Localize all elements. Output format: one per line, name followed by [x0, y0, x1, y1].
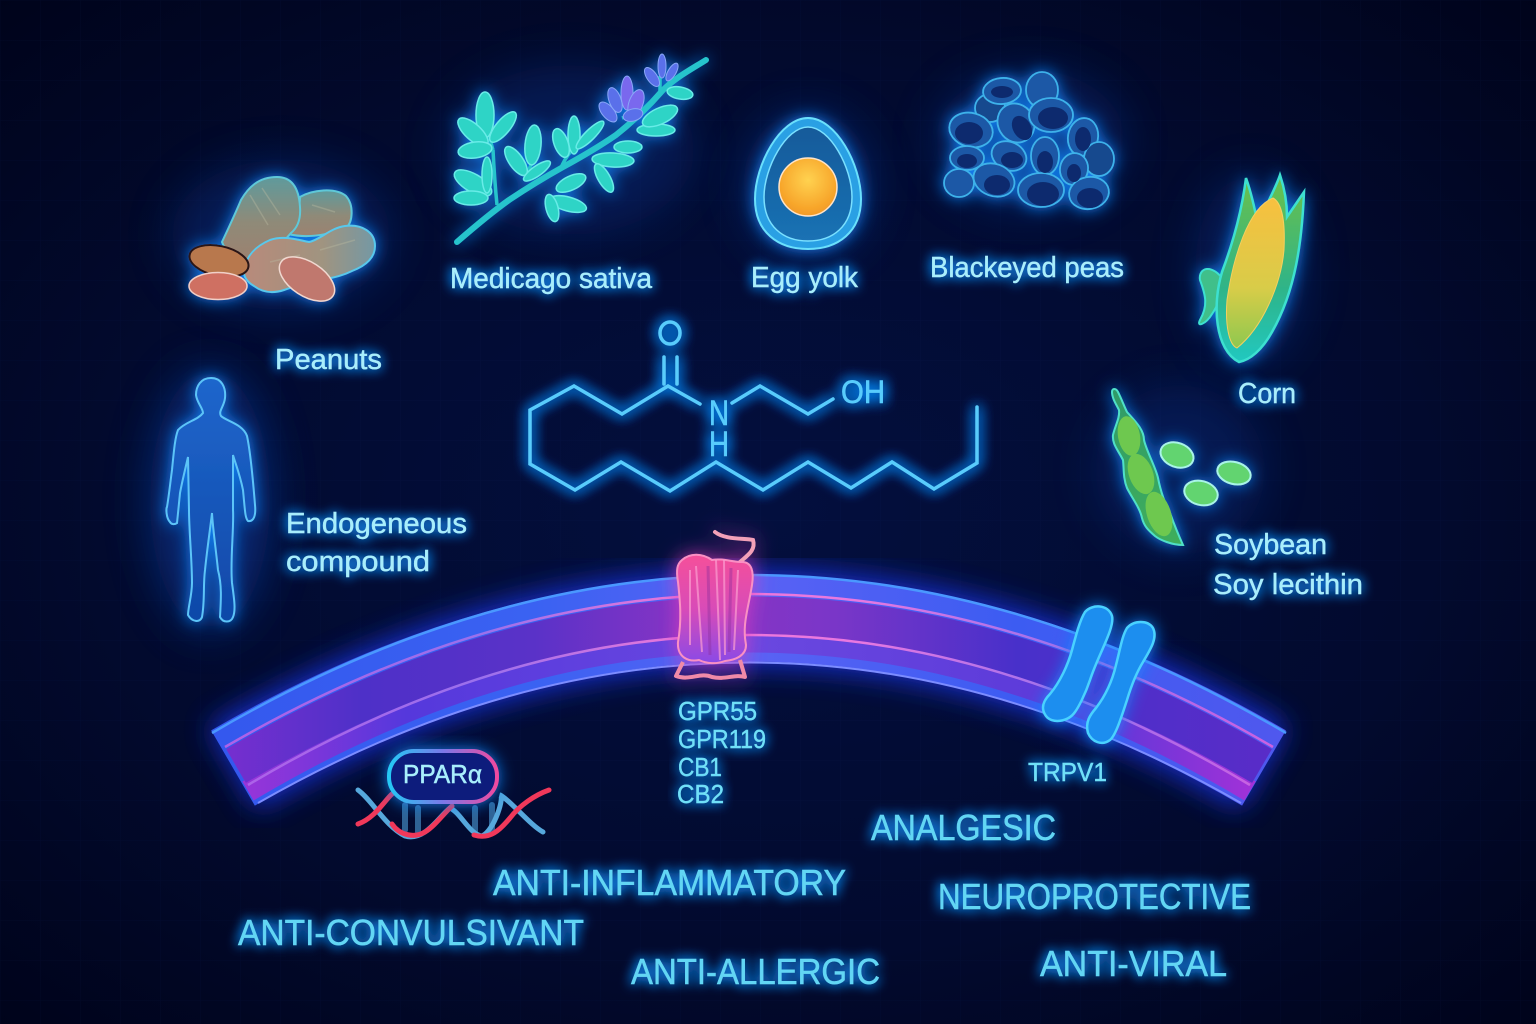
- icon: GPCR receptor: [676, 532, 754, 678]
- icon: medicago sativa sprig: [450, 54, 706, 242]
- effect: ANALGESIC: ANALGESIC: [871, 807, 1056, 848]
- effect: NEUROPROTECTIVE: NEUROPROTECTIVE: [938, 876, 1251, 917]
- label: Soybean, Soy lecithin: Soy lecithin: [1213, 569, 1363, 601]
- label: Corn: Corn: [1238, 378, 1296, 410]
- icon: human silhouette: [166, 378, 255, 622]
- molecule: palmitoylethanolamide structure: OH: [841, 374, 885, 410]
- effect: ANTI-VIRAL: ANTI-VIRAL: [1040, 943, 1227, 984]
- molecule: palmitoylethanolamide structure: N: [709, 394, 729, 433]
- icon: blackeyed peas: [944, 72, 1114, 212]
- effect: ANTI-CONVULSIVANT: ANTI-CONVULSIVANT: [238, 912, 584, 953]
- label: Peanuts: Peanuts: [275, 344, 382, 376]
- icon: TRPV1 channel: [1043, 606, 1155, 743]
- icon: corn cob: [1199, 175, 1304, 362]
- PPAR-alpha badge: [389, 751, 497, 802]
- icon: peanuts: [187, 177, 375, 310]
- label: Endogeneous compound: Endogeneous: [286, 508, 467, 540]
- label: TRPV1: TRPV1: [1028, 757, 1107, 787]
- icon: soybean pod and beans: [1112, 389, 1253, 545]
- label: Medicago sativa: Medicago sativa: [450, 263, 653, 295]
- label: Soybean, Soy lecithin: Soybean: [1214, 529, 1327, 561]
- label: GPCR targets: [677, 696, 766, 809]
- label: Endogeneous compound: compound: [286, 546, 430, 578]
- effect: ANTI-INFLAMMATORY: ANTI-INFLAMMATORY: [493, 862, 846, 903]
- molecule: palmitoylethanolamide structure: [530, 322, 977, 491]
- PPAR-alpha badge: PPARα: [403, 759, 482, 789]
- effect: ANTI-ALLERGIC: ANTI-ALLERGIC: [631, 951, 880, 992]
- label: GPCR targets: GPR55: [678, 696, 757, 726]
- label: Endogeneous compound: [286, 508, 467, 578]
- molecule: palmitoylethanolamide structure: H: [709, 425, 729, 464]
- label: GPCR targets: GPR119: [678, 724, 766, 754]
- label: GPCR targets: CB1: [678, 752, 722, 782]
- icon: egg with yolk: [755, 118, 861, 249]
- cell membrane arc: [212, 575, 1286, 803]
- label: Blackeyed peas: Blackeyed peas: [930, 252, 1124, 284]
- label: Soybean, Soy lecithin: [1213, 529, 1363, 601]
- icon: PPAR-alpha on DNA: [358, 751, 549, 837]
- label: Egg yolk: Egg yolk: [751, 262, 858, 294]
- label: GPCR targets: CB2: [677, 779, 724, 809]
